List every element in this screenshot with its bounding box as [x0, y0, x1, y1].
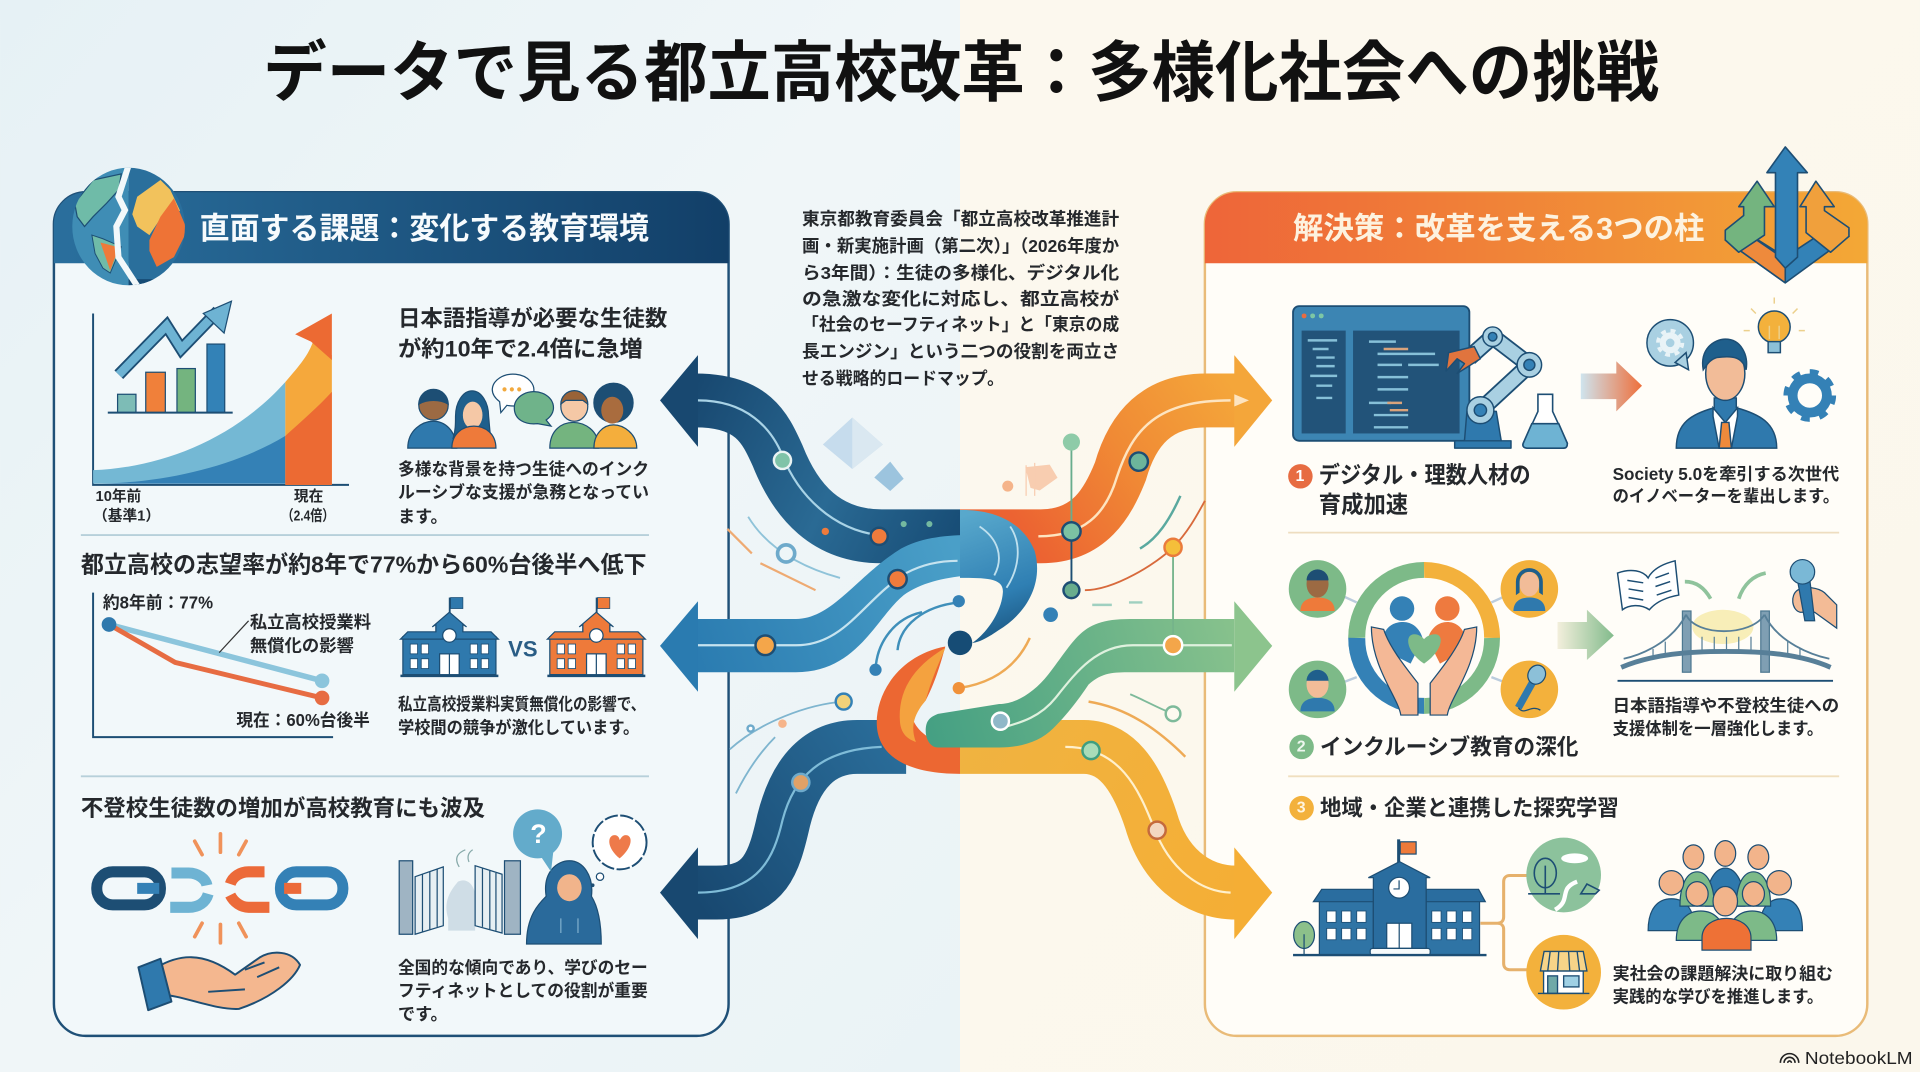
section 1 body text: ます。	[398, 507, 448, 527]
ribbon: bottom right yellow	[960, 747, 1272, 939]
chart axis labels: （2.4倍）	[282, 507, 334, 525]
icon: robot arm	[1446, 327, 1542, 448]
panel heading: 直面する課題：変化する教育環境	[200, 212, 649, 246]
pillar 3 body text: 実社会の課題解決に取り組む	[1613, 963, 1833, 983]
trend arrow	[119, 311, 218, 375]
section 3 body text: です。	[398, 1004, 448, 1024]
ribbon: left orange swirl	[877, 647, 960, 774]
pillar 2 heading: インクルーシブ教育の深化	[1320, 734, 1578, 759]
arrow: to innovator	[1581, 361, 1642, 411]
pillar 1 body text: のイノベーターを輩出します。	[1613, 486, 1839, 506]
icon: question bubble	[513, 809, 562, 872]
icon: inclusion ring	[1357, 569, 1493, 715]
icon: bridge	[1618, 610, 1833, 681]
panel frame	[54, 192, 729, 1036]
icon: cracked globe	[72, 168, 185, 286]
gear	[1793, 378, 1827, 413]
intro paragraph: ら3年間）：生徒の多様化、デジタル化	[802, 263, 1120, 283]
pillar 3 heading: 地域・企業と連携した探究学習	[1320, 796, 1619, 821]
mini bar chart	[108, 344, 233, 413]
chart: application rate	[93, 592, 371, 737]
icon: diverse students	[408, 374, 637, 448]
chart axis labels: 10年前	[96, 487, 142, 505]
intro paragraph: 長エンジン」という二つの役割を両立さ	[802, 341, 1119, 361]
section 1 heading: が約10年で2.4倍に急増	[398, 335, 643, 361]
ribbon: bottom left dark blue	[660, 747, 906, 939]
intro paragraph: 「社会のセーフティネット」と「東京の成	[802, 314, 1119, 334]
section 1 body text: 多様な背景を持つ生徒へのインク	[398, 459, 649, 479]
intro paragraph	[802, 209, 1120, 388]
section 2 body text: 私立高校授業料実質無償化の影響で、	[398, 694, 645, 714]
chart: application rate: 無償化の影響	[250, 635, 354, 655]
pillar 1 body text: Society 5.0を牽引する次世代	[1613, 464, 1839, 484]
pillar 3 body text: 実践的な学びを推進します。	[1613, 987, 1823, 1007]
chart: application rate: 約8年前：77%	[103, 592, 213, 612]
icon: group of learners	[1648, 841, 1802, 950]
section 2 body text: 学校間の競争が激化しています。	[398, 717, 639, 737]
intro paragraph: の急激な変化に対応し、都立高校が	[802, 289, 1120, 309]
icon: nature and town	[1526, 838, 1601, 912]
icon: public school vs private school	[400, 598, 645, 676]
icon: heart thought bubble	[591, 815, 647, 887]
ribbon: top left dark blue	[660, 355, 960, 536]
background: right half	[960, 0, 1920, 1072]
pillar 3 body text	[1613, 963, 1833, 1007]
NotebookLM watermark: NotebookLM	[1805, 1048, 1913, 1068]
arrow: to bridge	[1558, 610, 1614, 660]
panel frame	[1205, 192, 1867, 1036]
pillar 1 heading: 育成加速	[1319, 491, 1408, 517]
pillar 1 heading: デジタル・理数人材の	[1319, 462, 1531, 488]
pillar 2 heading: 2	[1297, 738, 1306, 755]
icon: innovator with ideas	[1647, 298, 1833, 448]
chart axis labels: 現在	[294, 488, 323, 505]
decorative diamonds	[823, 418, 904, 491]
icon: school building	[1293, 840, 1487, 955]
station dots	[748, 433, 1182, 839]
panel: challenges	[54, 165, 729, 1036]
intro paragraph: 画・新実施計画（第二次）」（2026年度か	[802, 236, 1120, 256]
icon: hooded student	[527, 861, 601, 944]
section 3 heading: 不登校生徒数の増加が高校教育にも波及	[81, 795, 485, 821]
gear bubble	[1647, 320, 1693, 366]
connector: school to community	[1480, 875, 1527, 970]
pillar 2 body text	[1613, 695, 1839, 739]
title: データで見る都立高校改革：多様化社会への挑戦	[263, 36, 1659, 110]
chart axis labels: （基準1）	[93, 507, 160, 525]
icon: code window	[1293, 306, 1469, 441]
section 3 body text	[398, 957, 648, 1024]
background: left half	[0, 0, 960, 1072]
arrows: book to mic	[1685, 573, 1766, 599]
panel header band	[54, 192, 729, 263]
chart: growth curve	[93, 301, 349, 485]
section 2 body text	[398, 694, 645, 737]
section 1 body text	[398, 459, 649, 527]
ribbon: right green	[926, 601, 1272, 748]
icon: microphone in hand	[1790, 560, 1837, 628]
decorative flag	[1026, 463, 1057, 496]
pillar 1 body text	[1613, 464, 1839, 506]
icon: community avatars	[1289, 560, 1558, 718]
pillar 1 heading	[1288, 462, 1531, 517]
section 3 body text: フティネットとしての役割が重要	[398, 981, 648, 1001]
ribbon: central swirl	[960, 510, 1037, 643]
section 1 heading	[398, 305, 667, 361]
central flow ribbons	[660, 355, 1272, 939]
icon: public school vs private school: VS	[508, 636, 538, 661]
ribbon: top right orange	[960, 355, 1272, 536]
panel header band	[1205, 192, 1867, 263]
pillar 2 body text: 支援体制を一層強化します。	[1613, 719, 1823, 739]
intro paragraph: 東京都教育委員会「都立高校改革推進計	[802, 209, 1120, 229]
icon: three pillars arrows	[1725, 147, 1849, 283]
section 2 heading: 都立高校の志望率が約8年で77%から60%台後半へ低下	[81, 551, 647, 577]
pillar 1 heading: 1	[1295, 468, 1304, 485]
ribbon: middle blue	[660, 535, 967, 692]
icon: question bubble: ?	[530, 819, 547, 849]
section 1 body text: ルーシブな支援が急務となってい	[398, 482, 649, 502]
section 1 heading: 日本語指導が必要な生徒数	[398, 305, 667, 331]
icon: broken chain	[97, 834, 343, 943]
icon: flask	[1523, 394, 1567, 448]
panel: solutions	[1205, 147, 1867, 1036]
chart: application rate: 私立高校授業料	[250, 612, 371, 632]
icon: shop	[1526, 935, 1601, 1010]
icon: school gate	[399, 850, 520, 934]
connector lines with stations	[727, 442, 1205, 793]
chart axis labels	[93, 487, 334, 525]
pillar 3 heading: 3	[1297, 800, 1306, 817]
section 3 body text: 全国的な傾向であり、学びのセー	[398, 957, 648, 977]
panel heading: 解決策：改革を支える3つの柱	[1293, 212, 1704, 246]
pillar 2 body text: 日本語指導や不登校生徒への	[1613, 695, 1839, 715]
intro paragraph: せる戦略的ロードマップ。	[802, 368, 1004, 388]
chart: application rate: 現在：60%台後半	[236, 710, 370, 730]
light bulb	[1758, 311, 1790, 343]
icon: supporting hand	[138, 953, 300, 1010]
icon: open book	[1618, 561, 1679, 610]
